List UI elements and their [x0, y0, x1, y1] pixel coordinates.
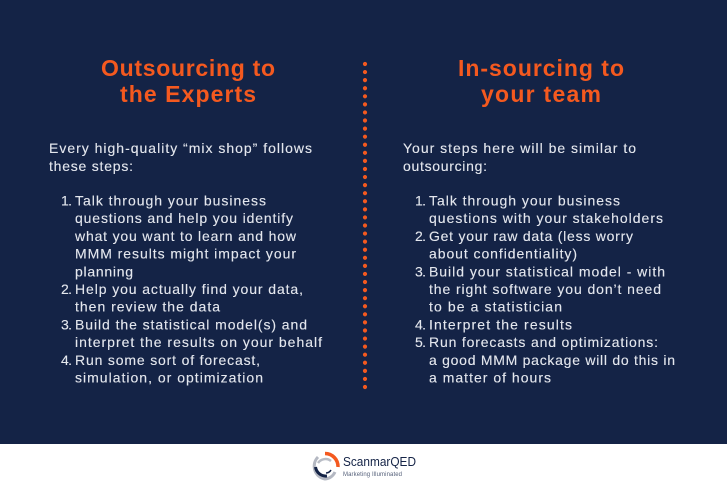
intro text: in-sourcing: [403, 140, 636, 174]
logo wordmark: ScanmarQED: [343, 454, 416, 469]
panel: outsourcing: [49, 55, 322, 386]
intro text: in-sourcing: Your steps here will be similar to: [403, 140, 636, 156]
numbered steps: outsourcing: MMM results might impact your: [75, 246, 296, 262]
numbered steps: outsourcing: 2.: [61, 281, 72, 297]
heading: outsourcing: [101, 55, 275, 107]
numbered steps: in-sourcing: 1.: [415, 192, 426, 208]
numbered steps: in-sourcing: a good MMM package will do this in: [429, 352, 675, 368]
heading: in-sourcing: [458, 55, 624, 107]
numbered steps: outsourcing: what you want to learn and how: [74, 228, 297, 244]
numbered steps: outsourcing: Help you actually find your data,: [75, 281, 303, 297]
numbered steps: in-sourcing: 3.: [415, 263, 426, 279]
numbered steps: outsourcing: Run some sort of forecast,: [75, 352, 260, 368]
numbered steps: outsourcing: questions and help you identify: [75, 210, 293, 226]
numbered steps: outsourcing: [61, 192, 322, 386]
dotted divider: [363, 64, 367, 388]
numbered steps: outsourcing: planning: [75, 263, 133, 279]
icon: ScanmarQED logo: [314, 454, 338, 479]
numbered steps: outsourcing: 4.: [61, 352, 72, 368]
numbered steps: outsourcing: 3.: [61, 316, 72, 332]
heading: in-sourcing: In-sourcing to: [458, 55, 624, 81]
heading: outsourcing: the Experts: [120, 81, 256, 107]
numbered steps: in-sourcing: Run forecasts and optimizations:: [429, 334, 658, 350]
numbered steps: in-sourcing: 2.: [415, 228, 426, 244]
heading: in-sourcing: your team: [481, 81, 601, 107]
numbered steps: in-sourcing: questions with your stakeholders: [429, 210, 663, 226]
numbered steps: outsourcing: Build the statistical model(s) and: [75, 316, 307, 332]
numbered steps: outsourcing: simulation, or optimization: [75, 370, 263, 386]
footer band: [0, 444, 727, 484]
numbered steps: in-sourcing: to be a statistician: [429, 299, 562, 315]
numbered steps: in-sourcing: Get your raw data (less worry: [429, 228, 633, 244]
numbered steps: outsourcing: interpret the results on your behalf: [75, 334, 322, 350]
numbered steps: in-sourcing: about confidentiality): [429, 246, 577, 262]
numbered steps: in-sourcing: 4.: [415, 316, 426, 332]
heading: outsourcing: Outsourcing to: [101, 55, 275, 81]
intro text: outsourcing: [49, 140, 312, 174]
numbered steps: in-sourcing: Talk through your business: [429, 192, 620, 208]
intro text: outsourcing: Every high-quality “mix shop” follows: [49, 140, 312, 156]
numbered steps: in-sourcing: a matter of hours: [429, 370, 551, 386]
numbered steps: outsourcing: 1.: [61, 192, 72, 208]
logo tagline: Marketing Illuminated: [343, 472, 402, 478]
numbered steps: in-sourcing: the right software you don’t need: [429, 281, 661, 297]
intro text: in-sourcing: outsourcing:: [403, 158, 487, 174]
numbered steps: outsourcing: then review the data: [75, 299, 220, 315]
numbered steps: outsourcing: Talk through your business: [75, 192, 266, 208]
intro text: outsourcing: these steps:: [49, 158, 133, 174]
numbered steps: in-sourcing: Interpret the results: [429, 316, 572, 332]
numbered steps: in-sourcing: [415, 192, 675, 386]
panel: in-sourcing: [403, 55, 675, 386]
numbered steps: in-sourcing: Build your statistical model - with: [429, 263, 665, 279]
numbered steps: in-sourcing: 5.: [415, 334, 426, 350]
